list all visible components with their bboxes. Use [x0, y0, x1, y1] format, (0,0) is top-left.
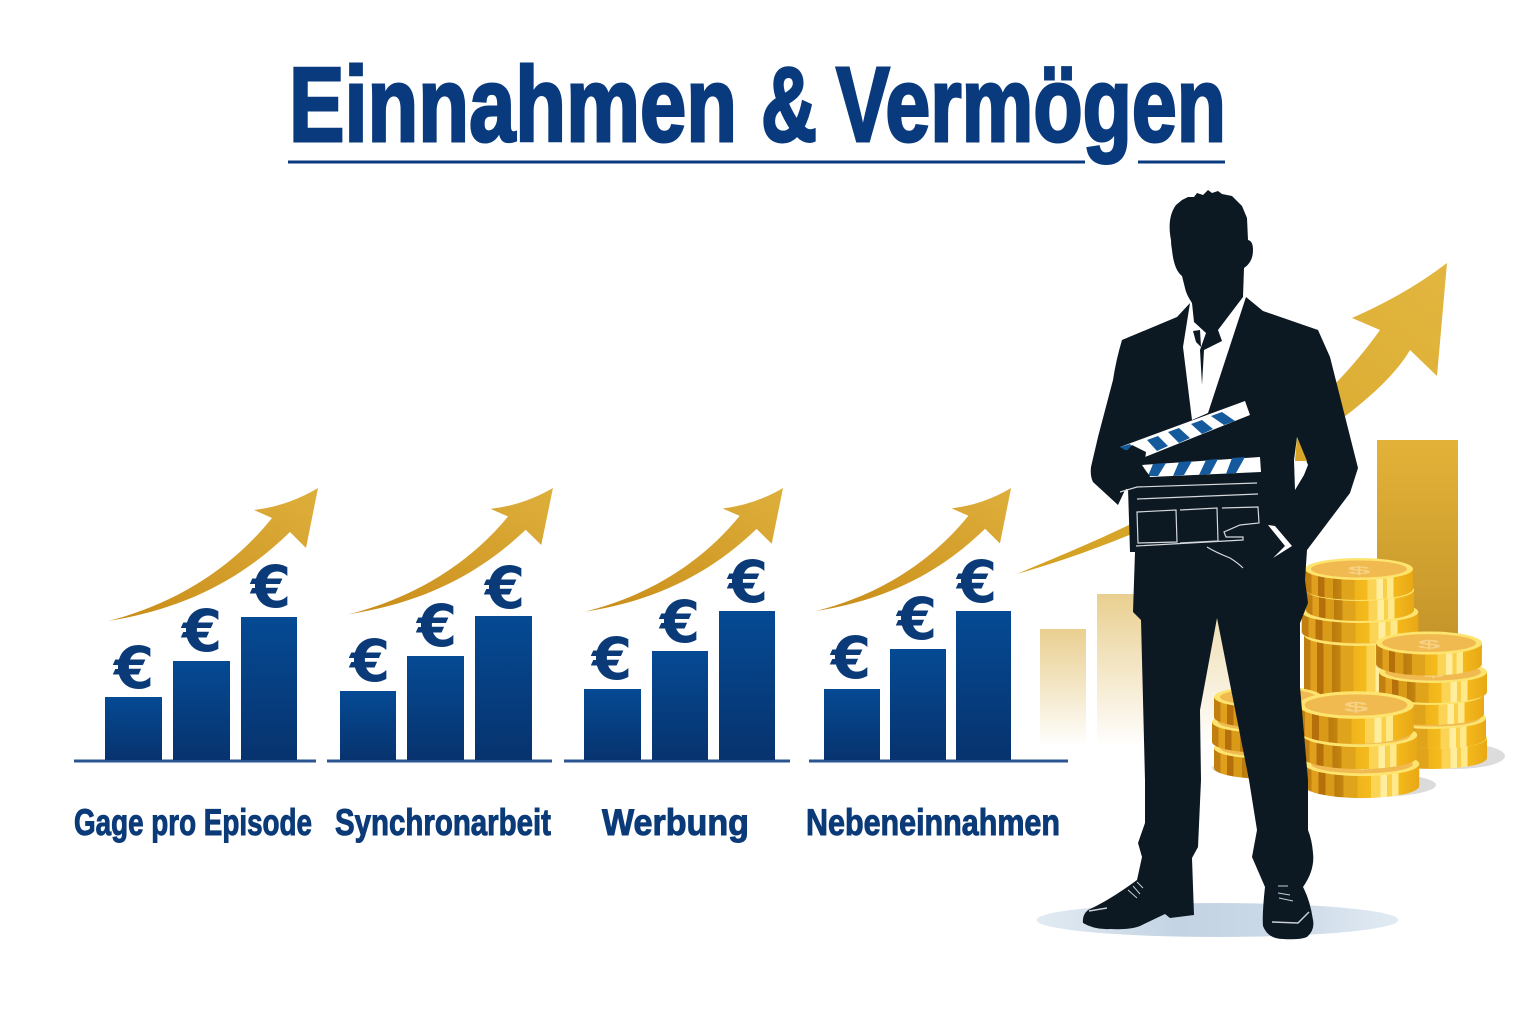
euro symbols 3 — [590, 548, 768, 693]
euro symbols 2: € — [415, 592, 457, 660]
shirt cuff — [1268, 525, 1292, 558]
arrow: rising 1 — [108, 488, 318, 621]
arrow: large gold growth arrow — [1017, 263, 1447, 574]
euro symbols 4 — [829, 548, 997, 692]
background growth bars — [1040, 440, 1458, 747]
panel: Nebeneinnahmen — [806, 488, 1068, 843]
arrow: rising 2 — [348, 488, 553, 614]
title: & — [761, 46, 817, 164]
euro symbols 3: € — [658, 588, 700, 656]
euro symbols 4: € — [829, 624, 871, 692]
euro symbols 1 — [112, 553, 291, 702]
panel: Gage pro Episode — [74, 488, 318, 843]
arm gap — [1294, 437, 1308, 490]
label 4: Nebeneinnahmen — [806, 802, 1060, 843]
suit and legs — [1083, 297, 1358, 939]
hand on clapper — [1110, 445, 1150, 490]
euro symbols 2: € — [483, 554, 525, 622]
coin stack: back — [1302, 558, 1418, 703]
label 2: Synchronarbeit — [335, 802, 551, 843]
arrow: rising 3 — [585, 488, 783, 612]
clapper board — [1110, 401, 1292, 568]
bar chart 3 — [564, 611, 790, 762]
title — [288, 46, 1226, 164]
title: Vermögen — [836, 46, 1226, 164]
euro symbols 2 — [348, 554, 525, 695]
title: Einnahmen — [289, 46, 737, 164]
panel: Synchronarbeit — [327, 488, 553, 843]
euro symbols 4: € — [895, 585, 937, 653]
coin shadows — [1212, 743, 1505, 797]
clapper top stick — [1120, 401, 1250, 457]
euro symbols 3: € — [590, 625, 632, 693]
euro symbols 3: € — [726, 548, 768, 616]
euro symbols 1: € — [249, 553, 291, 621]
euro symbols 1: € — [112, 634, 154, 702]
coin stack: front — [1298, 691, 1419, 798]
bar chart 4 — [809, 611, 1068, 762]
shirt — [1183, 294, 1246, 420]
euro symbols 2: € — [348, 627, 390, 695]
bar chart 2 — [327, 616, 552, 762]
label 1: Gage pro Episode — [74, 802, 312, 843]
head and neck — [1170, 190, 1253, 385]
label 3: Werbung — [602, 802, 749, 843]
icon: coin stacks — [1212, 558, 1505, 798]
euro symbols 4: € — [955, 548, 997, 616]
shoe highlights — [1089, 882, 1309, 923]
euro symbols 1: € — [180, 597, 222, 665]
man silhouette with clapperboard — [1083, 190, 1358, 939]
clapper markings — [1120, 483, 1259, 568]
icon: floor shadow — [1036, 903, 1398, 937]
panel: Werbung — [564, 488, 790, 843]
bar chart 1 — [74, 617, 316, 762]
coin stack: left — [1212, 686, 1322, 779]
arrow: rising 4 — [816, 488, 1011, 611]
coin stack: right — [1376, 631, 1487, 769]
clapper lower stick — [1142, 457, 1261, 477]
collar detail — [1193, 330, 1201, 347]
